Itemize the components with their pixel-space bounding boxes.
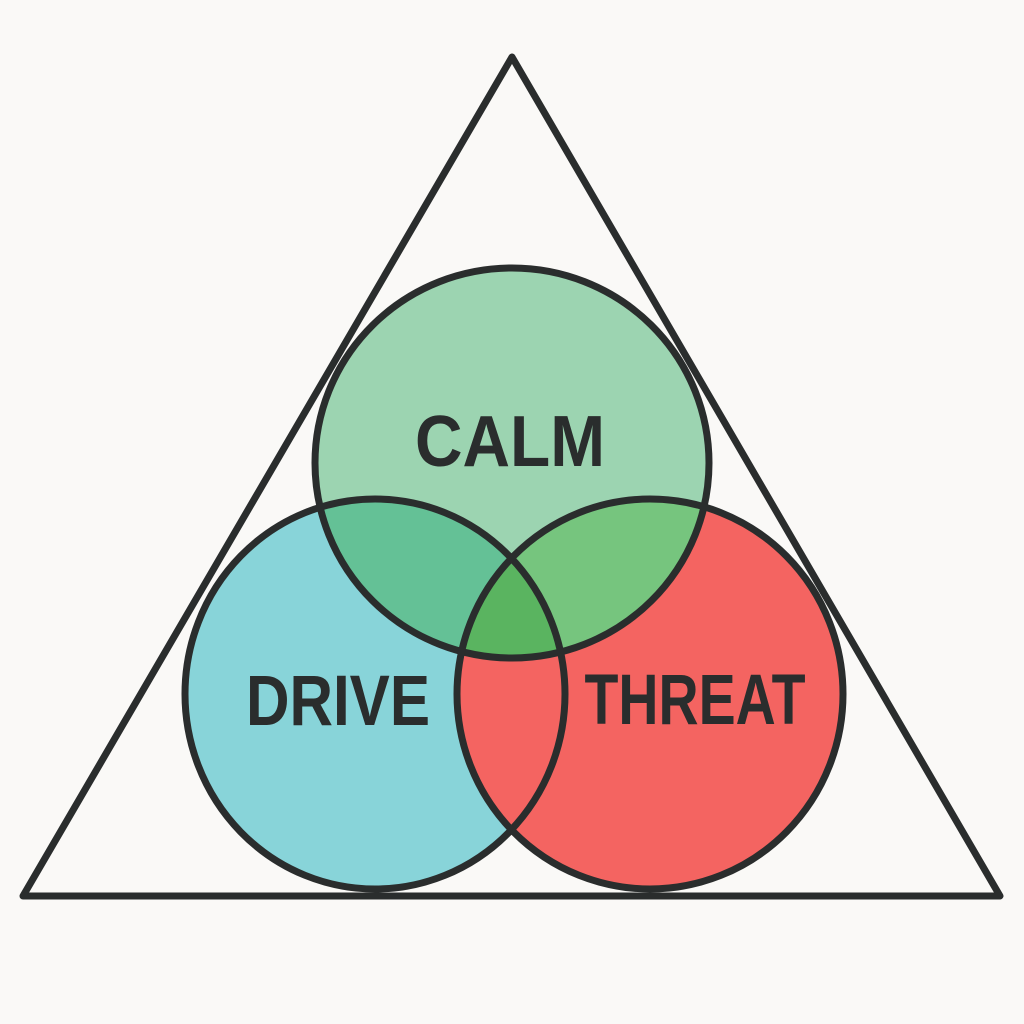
circle fill: drive <box>185 499 565 889</box>
circle fill: calm <box>315 268 709 658</box>
label: drive: DRIVE <box>246 662 430 741</box>
label: calm: CALM <box>415 402 605 482</box>
triangle outline <box>23 57 1000 896</box>
venn diagram <box>185 268 843 889</box>
overlap: calm and threat <box>516 502 700 648</box>
circle outlines <box>185 268 843 889</box>
overlap: calm and drive <box>324 502 506 647</box>
overlap: all three <box>466 564 556 654</box>
circle fill: threat <box>457 499 843 889</box>
label: threat: THREAT <box>584 661 806 740</box>
